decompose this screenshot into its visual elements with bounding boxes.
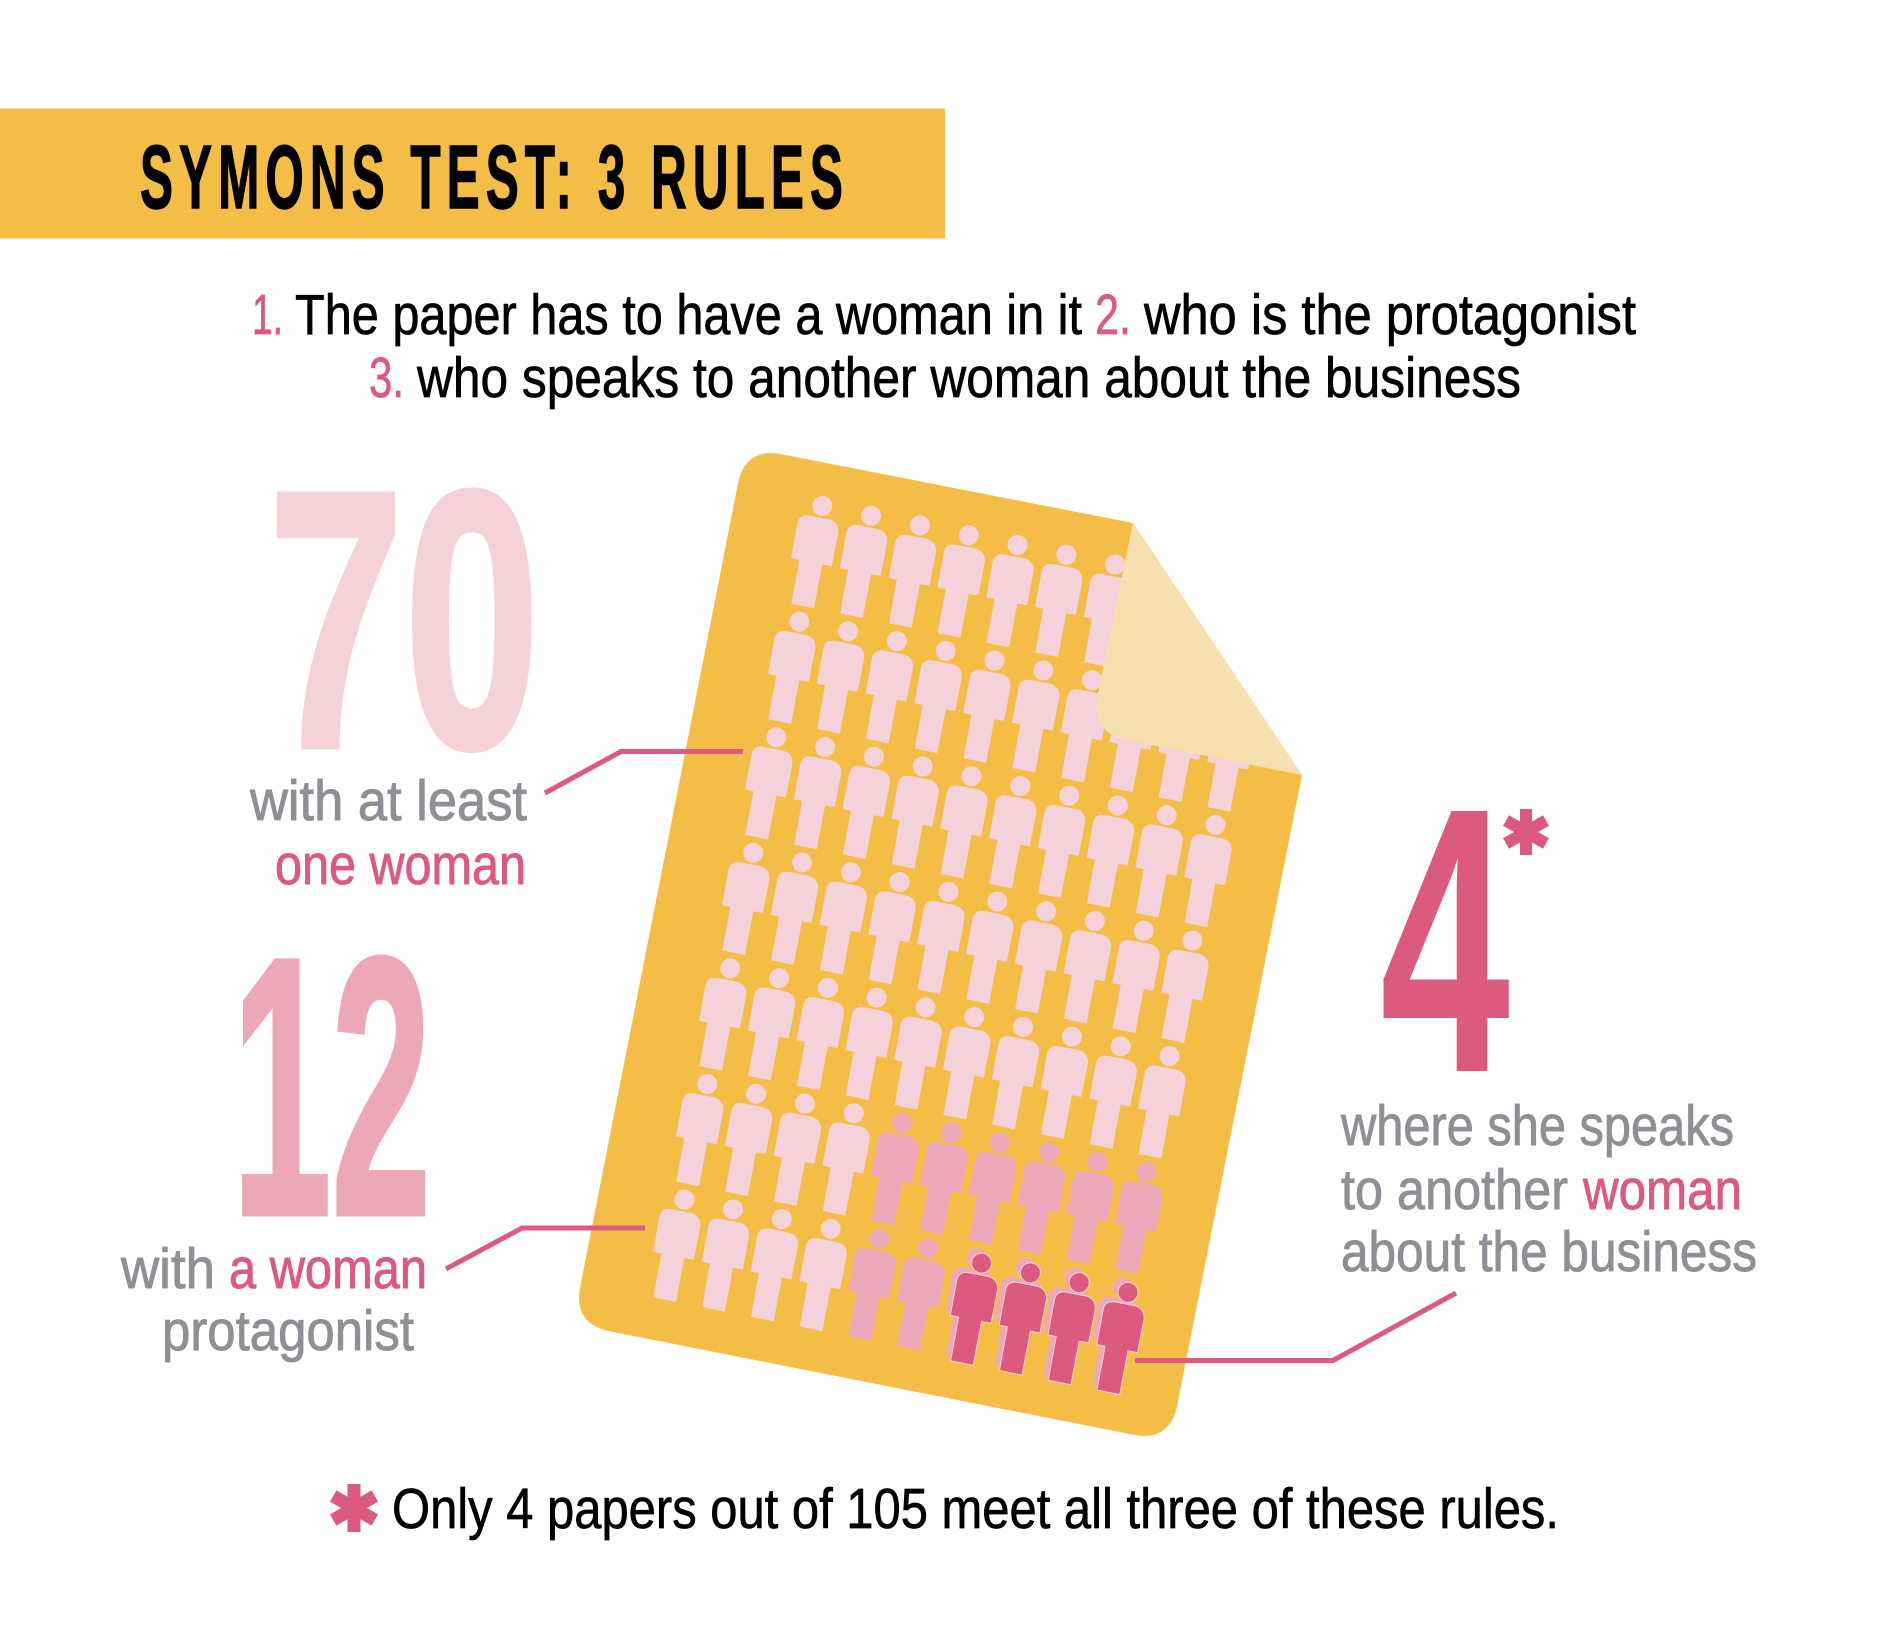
stat: 4: 4 <box>1380 730 1511 1152</box>
rules text: The paper has to have a woman in it <box>295 283 1082 347</box>
rules text: 3. <box>369 346 404 410</box>
label: where she speaks to another woman about the business: about the business <box>1341 1220 1757 1284</box>
pictogram grid: 70 papers <box>653 496 1278 1395</box>
medium figures: 12 with a woman protagonist <box>848 1113 1163 1390</box>
rules text: 2. <box>1095 283 1131 347</box>
rules text: who speaks to another woman about the business <box>416 346 1521 410</box>
footnote: Only 4 papers out of 105 meet all three of these rules. <box>392 1477 1559 1541</box>
connector: 70 <box>545 752 743 793</box>
title banner <box>0 108 945 238</box>
rules text: who is the protagonist <box>1143 283 1636 347</box>
folded corner <box>1097 523 1302 775</box>
label: with at least one woman <box>249 769 527 897</box>
label: with at least one woman: with at least <box>249 769 527 833</box>
label: with a woman protagonist: a woman <box>229 1237 427 1301</box>
label: where she speaks to another woman about the business: to another <box>1341 1158 1568 1222</box>
title: SYMONS TEST: 3 RULES <box>140 127 843 228</box>
rules text <box>252 283 1636 410</box>
stat: 12 <box>120 881 431 1363</box>
stat: 70 <box>249 414 540 897</box>
dark figures: 4 where she speaks to another woman <box>950 1253 1144 1395</box>
rules text: 1. <box>252 283 283 347</box>
label: with a woman protagonist: with <box>120 1237 215 1301</box>
label: where she speaks to another woman about the business: where she speaks <box>1340 1094 1734 1158</box>
stat: 4 <box>1340 730 1757 1284</box>
label: where she speaks to another woman about the business: woman <box>1582 1158 1742 1222</box>
stat: 70: 70 <box>268 414 540 825</box>
paper sheet <box>579 453 1302 1436</box>
label: with at least one woman: one woman <box>275 833 526 897</box>
label: where she speaks to another woman about the business <box>1340 1094 1757 1284</box>
infographic canvas: 12 <box>232 881 431 1292</box>
rows of pale figures <box>653 496 1278 1331</box>
paper illustration <box>579 453 1302 1436</box>
label: with a woman protagonist <box>120 1237 427 1363</box>
connector: 4 <box>1135 1293 1456 1360</box>
icon: asterisk <box>1503 809 1549 855</box>
icon: footnote asterisk <box>330 1484 378 1532</box>
label: with a woman protagonist: protagonist <box>162 1299 414 1363</box>
connector: 12 <box>446 1228 645 1269</box>
